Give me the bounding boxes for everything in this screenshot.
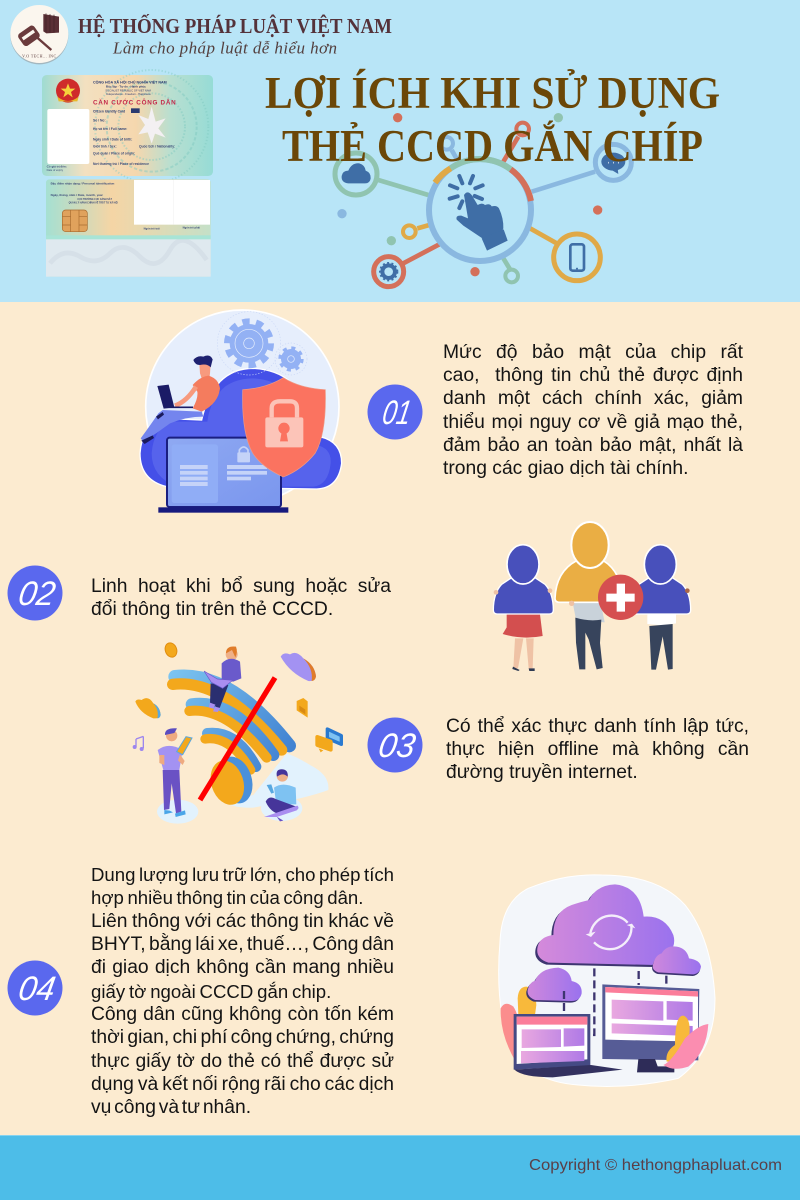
icon: citizen ID card back: QUẢN LÝ HÀNH CHÍNH VỀ TRẬT TỰ XÃ HỘI — [69, 201, 118, 204]
icon: citizen ID card front: Quê quán / Place of origin: — [93, 152, 135, 156]
text block 04: BHYT, bằng lái xe, thuế…, Công dân — [91, 934, 394, 955]
illustration: cloud security — [140, 310, 342, 513]
text block 04: đi giao dịch không cần mang nhiều — [91, 957, 394, 978]
text block 04: giấy tờ ngoài CCCD gắn chip. — [91, 981, 331, 1002]
text block 04: Liên thông với các thông tin khác về — [91, 911, 394, 932]
icon: citizen ID card front: Independence - Freedom - Happiness — [106, 92, 151, 96]
tagline: Làm cho pháp luật dễ hiểu hơn — [112, 38, 337, 58]
title: THẺ CCCD GẮN CHÍP — [282, 121, 703, 171]
icon: citizen ID card back — [46, 179, 211, 277]
icon: citizen ID card back: Ngón trỏ phải — [183, 226, 200, 230]
text block 03: đường truyền internet. — [446, 762, 638, 783]
icon: citizen ID card front: Số / No: — [93, 118, 106, 122]
icon: citizen ID card front: Citizen Identity Card — [93, 109, 125, 113]
icon: citizen ID card front — [42, 70, 213, 183]
text block 01: đảm bảo an toàn bảo mật, nhất là — [443, 435, 743, 456]
badge 01 — [368, 384, 422, 440]
text block 01: trong các giao dịch tài chính. — [443, 458, 688, 479]
text block 04: vụ công và tư nhân. — [91, 1097, 251, 1118]
text block 02: đổi thông tin trên thẻ CCCD. — [91, 599, 333, 620]
title: LỢI ÍCH KHI SỬ DỤNG — [265, 68, 720, 118]
icon: citizen ID card back: Đặc điểm nhận dạng / Personal identification — [51, 182, 115, 186]
text block 01 — [443, 342, 743, 479]
logo: V.O TECH... INC — [22, 53, 57, 58]
icon: citizen ID card front: Độc lập - Tự do - Hạnh phúc — [106, 84, 146, 88]
header band — [0, 0, 800, 302]
text block 04: thực giấy tờ do thẻ có thể được sử — [91, 1051, 394, 1072]
text block 03: Có thể xác thực danh tính lập tức, — [446, 716, 749, 737]
site name: HỆ THỐNG PHÁP LUẬT VIỆT NAM — [78, 14, 392, 38]
badge 04 — [8, 960, 62, 1016]
icon: citizen ID card front: Quốc tịch / Nationality: — [139, 145, 175, 149]
badge 02: 02 — [16, 575, 58, 613]
text block 04 — [91, 864, 394, 1118]
icon: citizen ID card front: Ngày sinh / Date of birth: — [93, 137, 132, 141]
icon: citizen ID card front: SOCIALIST REPUBLIC OF VIET NAM — [105, 88, 151, 92]
network illustration — [335, 113, 631, 287]
icon: citizen ID card front: Nơi thường trú / Place of residence — [93, 162, 149, 166]
text block 04: Dung lượng lưu trữ lớn, cho phép tích — [91, 864, 394, 885]
text block 01: cao, thông tin chủ thẻ được định — [443, 365, 743, 386]
illustration: people with plus — [493, 522, 691, 671]
illustration: cloud sync devices — [499, 875, 715, 1086]
text block 04: dụng và kết nối rộng rãi cho các dịch — [91, 1074, 394, 1095]
icon: citizen ID card front: Có giá trị đến: — [47, 164, 67, 168]
icon: citizen ID card front: CĂN CƯỚC CÔNG DÂN — [93, 97, 176, 106]
logo — [10, 5, 68, 64]
text block 04: Công dân cũng không còn tốn kém — [91, 1004, 394, 1025]
icon: citizen ID card front: CỘNG HÒA XÃ HỘI CHỦ NGHĨA VIỆT NAM — [93, 79, 167, 84]
badge 04: 04 — [16, 970, 58, 1008]
icon: citizen ID card front: Họ và tên / Full name: — [93, 127, 127, 131]
badge 02 — [8, 566, 62, 620]
text block 03 — [446, 716, 749, 783]
badge 03: 03 — [376, 727, 418, 765]
icon: citizen ID card front: Giới tính / Sex: — [93, 145, 117, 149]
badge 03 — [368, 718, 422, 772]
text block 01: danh một cách chính xác, giảm — [443, 388, 743, 409]
copyright: Copyright © hethongphapluat.com — [529, 1157, 782, 1174]
text block 04: thời gian, chi phí công chứng, chứng — [91, 1027, 394, 1048]
text block 01: Mức độ bảo mật của chip rất — [443, 342, 743, 363]
footer band — [0, 1135, 800, 1200]
illustration: no wifi — [133, 641, 341, 824]
badge 01: 01 — [380, 394, 414, 432]
text block 03: thực hiện offline mà không cần — [446, 739, 749, 760]
icon: citizen ID card back: CỤC TRƯỞNG CỤC CẢNH SÁT — [77, 198, 112, 201]
text block 04: hợp nhiều thông tin của công dân. — [91, 887, 363, 908]
text block 01: thiểu mọi nguy cơ về giả mạo thẻ, — [443, 412, 743, 433]
text block 02 — [91, 576, 391, 620]
text block 02: Linh hoạt khi bổ sung hoặc sửa — [91, 576, 391, 597]
icon: citizen ID card front: Date of expiry — [47, 168, 64, 172]
icon: citizen ID card back: Ngày, tháng, năm / Date, month, year — [51, 193, 104, 197]
title — [265, 68, 720, 171]
icon: citizen ID card back: Ngón trỏ trái — [144, 226, 160, 230]
